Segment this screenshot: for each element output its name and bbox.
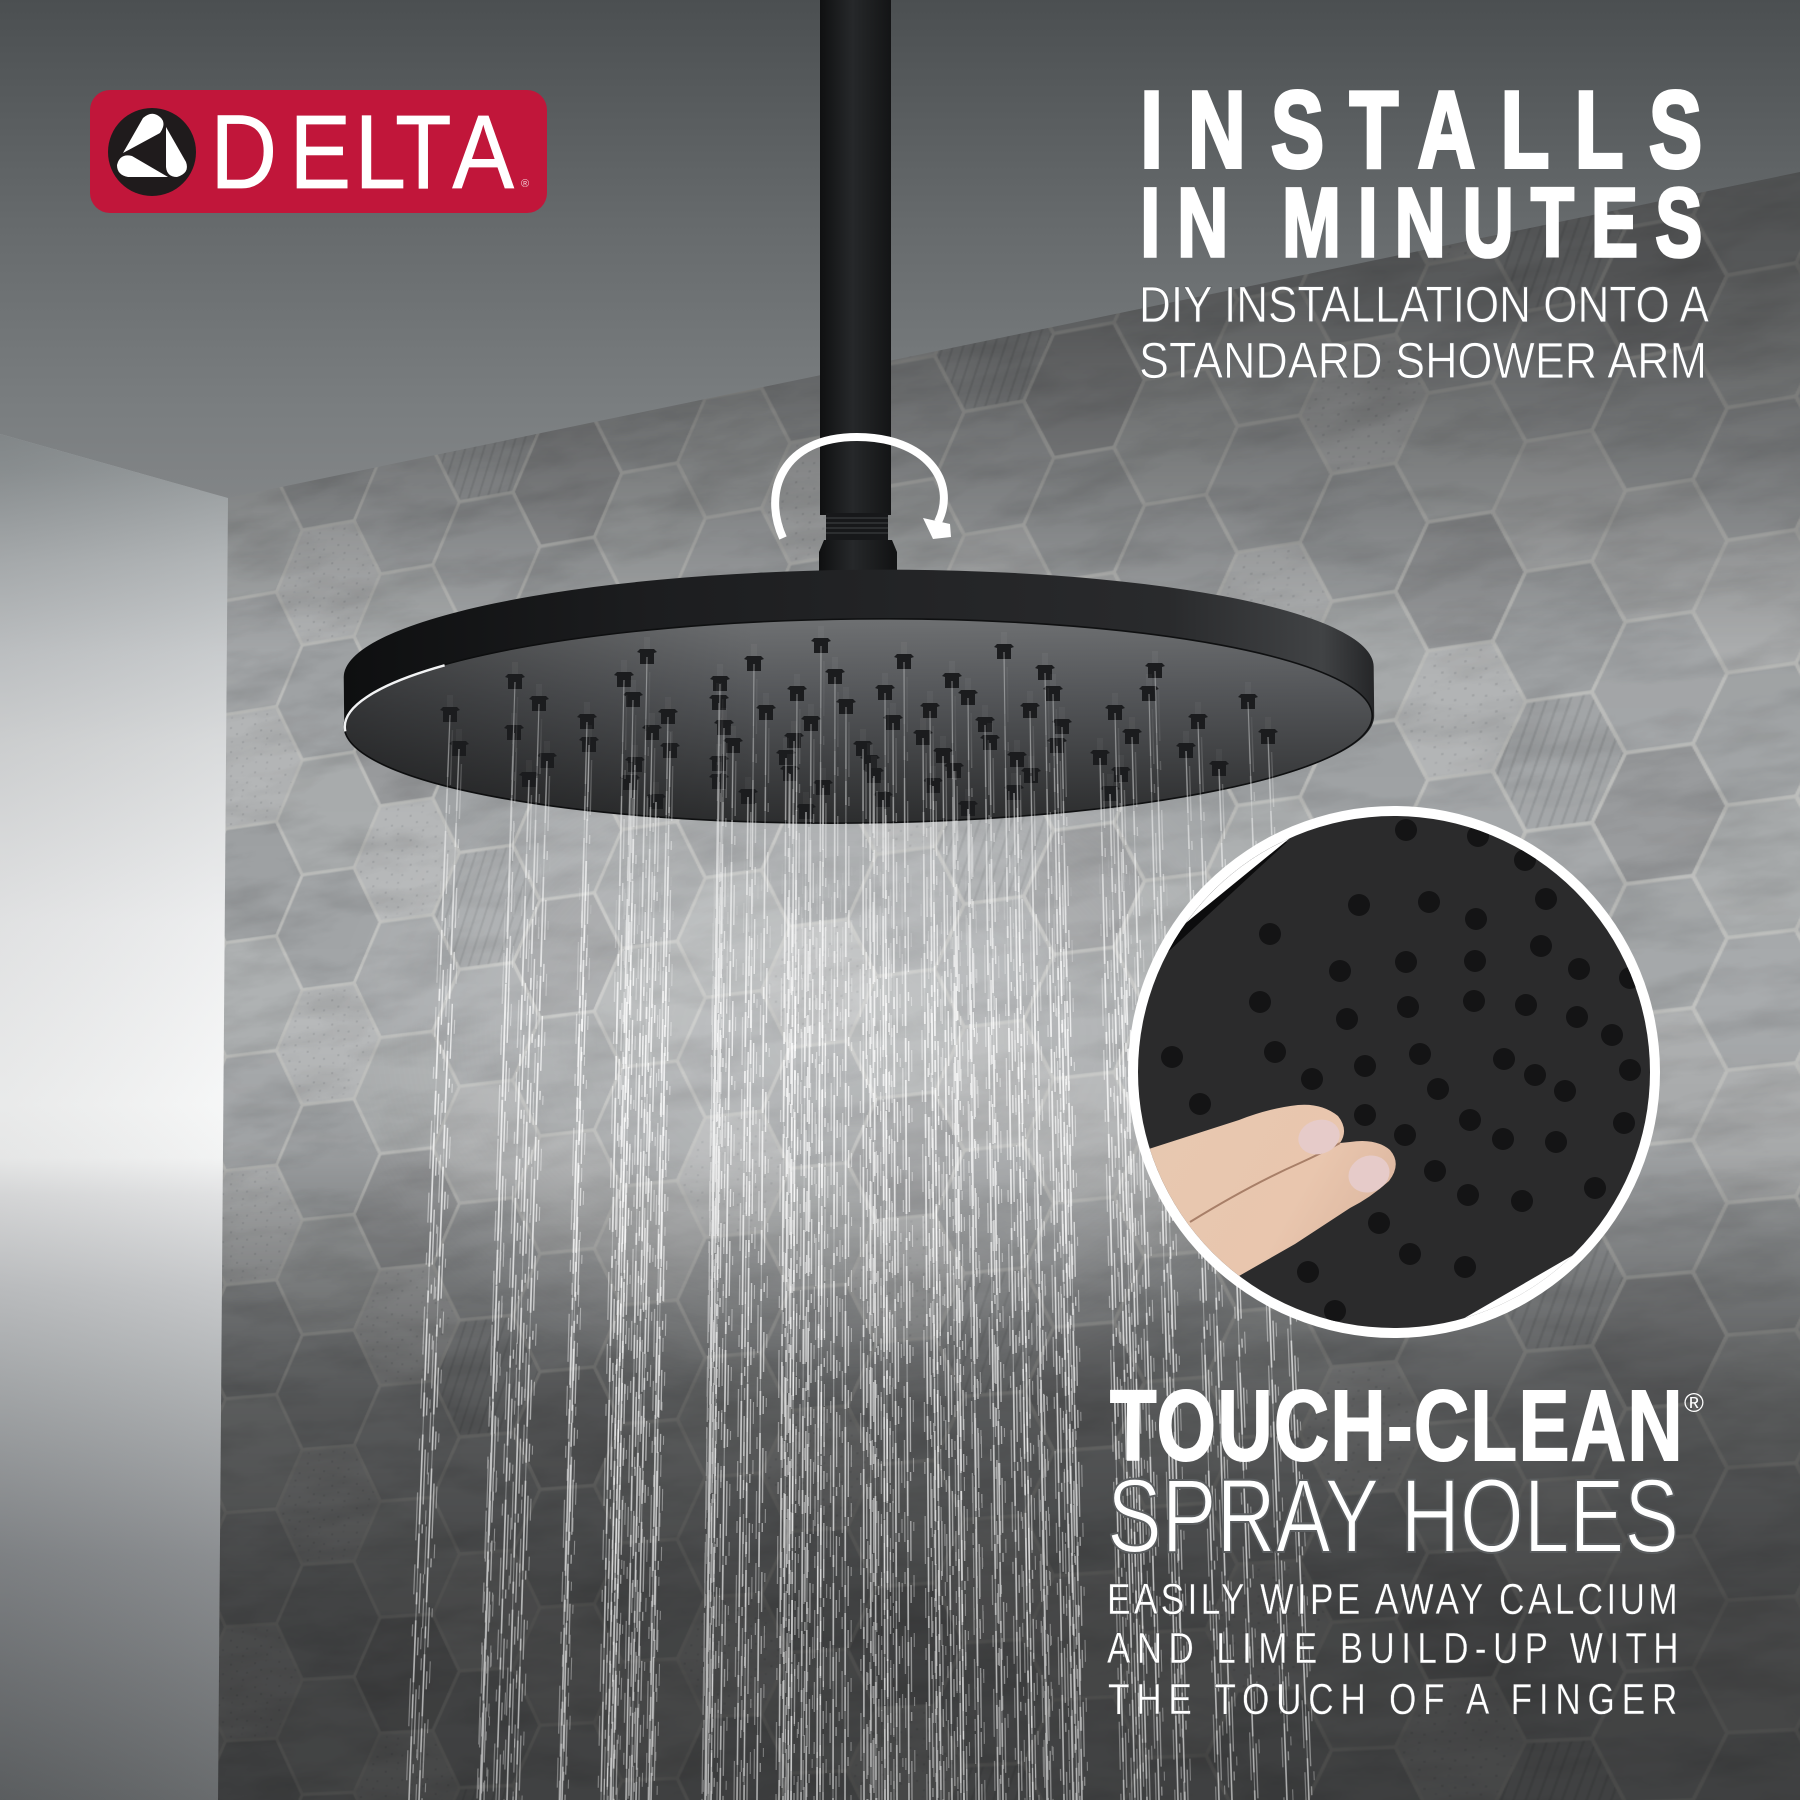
white edge sliver: [1464, 1256, 1572, 1318]
text: easily wipe away: [1107, 1576, 1685, 1724]
text: DIY installation: STANDARD SHOWER ARM: [1139, 332, 1707, 389]
text: easily wipe away: EASILY WIPE AWAY CALCIUM: [1107, 1576, 1681, 1624]
fingers: [1150, 1104, 1396, 1276]
detail callout circle: [1110, 806, 1660, 1345]
registered mark: ®: [521, 178, 529, 190]
spray nozzles: [440, 626, 1278, 819]
head face: [343, 614, 1373, 828]
heading: installs in minutes: [1140, 69, 1728, 277]
heading: touch-clean spray holes: [1107, 1370, 1704, 1575]
water streams: [406, 646, 1315, 1800]
spray hole nubs: [1161, 819, 1641, 1322]
shower head: [343, 564, 1375, 829]
Delta logo badge: [90, 90, 547, 213]
text: DIY installation: [1139, 276, 1709, 389]
logo wordmark: DELTA: [210, 92, 514, 210]
logo emblem: [108, 108, 196, 196]
ceiling: [0, 0, 1800, 498]
water haze: [330, 670, 1330, 1410]
white side wall panel: [0, 434, 228, 1800]
text: easily wipe away: THE TOUCH OF A FINGER: [1108, 1676, 1684, 1724]
head rim: [343, 564, 1375, 829]
face edge shadow: [1168, 842, 1287, 951]
shower arm: [819, 0, 897, 575]
rim highlight: [344, 665, 445, 731]
heading: touch-clean spray holes: ®: [1684, 1388, 1704, 1418]
sprayer face close-up: [1128, 806, 1660, 1338]
rotation arrow icon: [775, 437, 951, 539]
text: DIY installation: DIY INSTALLATION ONTO A: [1139, 276, 1709, 333]
